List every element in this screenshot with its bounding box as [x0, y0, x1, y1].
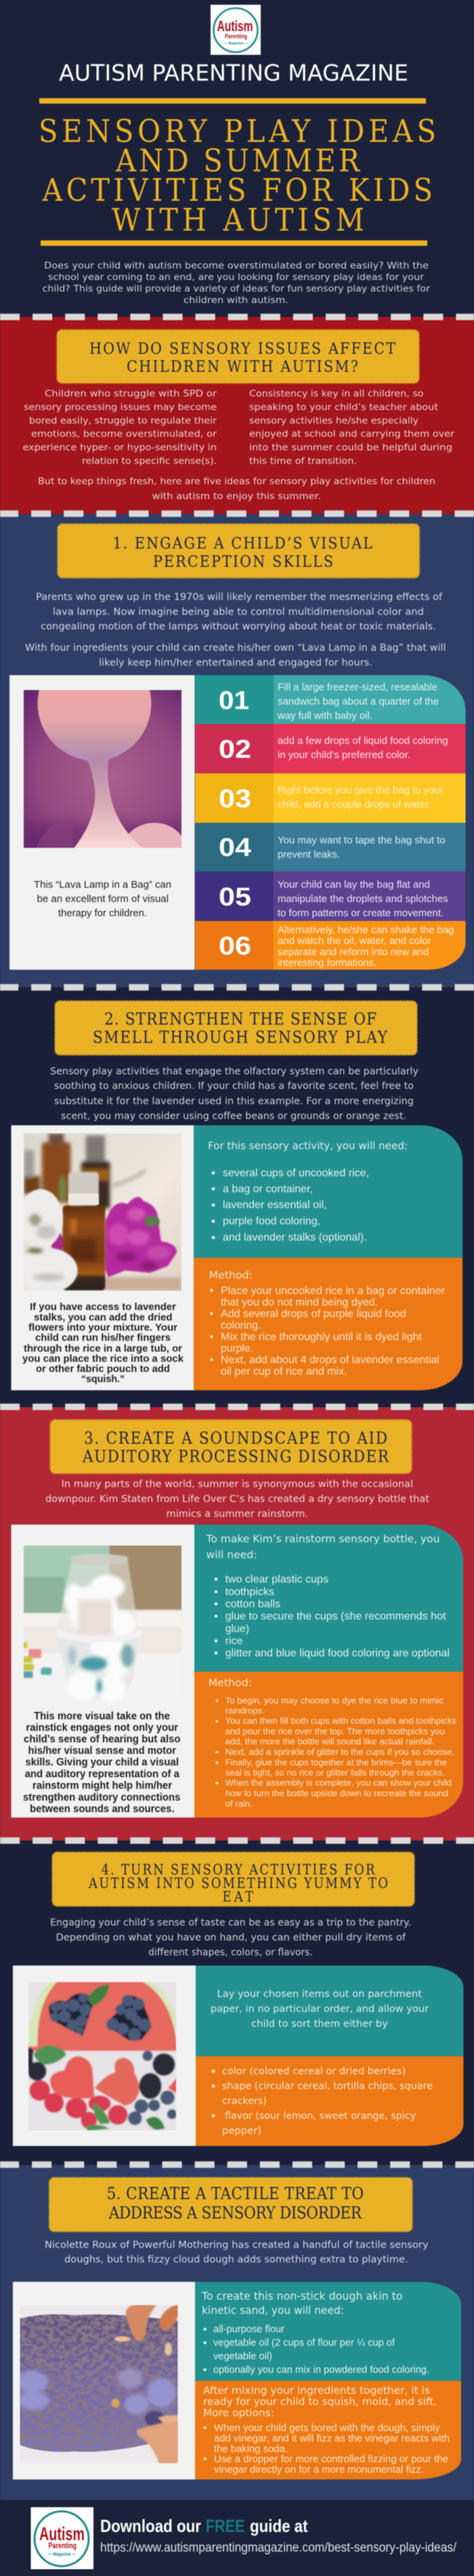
sensory issues section background [0, 317, 474, 514]
panel: rainstorm bottle image and caption [11, 1524, 194, 1818]
heading: section 4: EAT [223, 1889, 253, 1905]
section 4 text [50, 1918, 411, 1958]
panel: rainstorm bottle materials: toothpicks [225, 1586, 274, 1598]
caption: his/her visual sense and motor [28, 1745, 176, 1757]
step 06: separate and reform into new and [278, 947, 429, 958]
caption: This “Lava Lamp in a Bag” can [34, 879, 171, 890]
caption: child can run his/her fingers [35, 1333, 171, 1344]
step 01 [195, 675, 466, 724]
text block: right column: this time of transition. [249, 456, 357, 467]
intro paragraph: children with autism. [184, 295, 288, 305]
heading: how do sensory issues affect: HOW DO SENSORY ISSUES AFFECT [89, 341, 395, 358]
caption [23, 1711, 181, 1815]
section 3 background [0, 1407, 474, 1841]
section 5 text: doughs, but this fizzy cloud dough adds something extra to playtime. [64, 2254, 408, 2265]
step 05 [195, 872, 466, 921]
icon: footer logo: Autism [39, 2523, 85, 2544]
section 2 text: substitute it for the lavender used in this example. For a more energizing [54, 1096, 414, 1107]
section 2 background [0, 987, 474, 1407]
text block: left column: bored easily, struggle to regulate their [29, 415, 217, 426]
panel: dough method: ready for your child to squish, mold, and sift. [203, 2396, 437, 2408]
heading: section 1: PERCEPTION SKILLS [153, 553, 333, 571]
caption [22, 1302, 184, 1385]
step 05: manipulate the droplets and splotches [278, 894, 448, 905]
panel: rainstorm bottle materials: cotton balls [225, 1598, 280, 1610]
panel: rainstorm bottle method: To begin, you may choose to dye the rice blue to mimic [225, 1696, 444, 1705]
section 5 background [0, 2165, 474, 2500]
panel: lava lamp image and caption [9, 646, 195, 970]
panel: rainstorm bottle method: and pour the rice over the top. The more toothpicks you [225, 1727, 445, 1736]
closing paragraph: But to keep things fresh, here are five ideas for sensory play activities for children [38, 476, 435, 487]
panel: rainstorm bottle method: You can then fill both cups with cotton balls and toothpicks [225, 1717, 456, 1726]
panel: rainstorm bottle method: of rain. [225, 1799, 253, 1809]
panel: dough method: Use a dropper for more controlled fizzing or pour the [214, 2454, 448, 2465]
panel: materials list [194, 1125, 462, 1258]
panel: rainstorm bottle method: When the assembly is complete, you can show your child [225, 1778, 452, 1788]
section 1 text: lava lamps. Now imagine being able to control multidimensional color and [53, 607, 424, 618]
step 06: interesting formations. [278, 958, 376, 968]
step 03: child, add a couple drops of water. [278, 800, 431, 811]
panel: dough image [13, 2282, 195, 2480]
icon: magazine logo [211, 5, 261, 55]
step 01: sandwich bag about a quarter of the [278, 696, 439, 707]
section 2 text [50, 1066, 418, 1122]
text block: right column: sensory activities he/she especially [249, 415, 418, 426]
caption: flowers into your mixture. Your [28, 1323, 177, 1333]
heading: section 5: ADDRESS A SENSORY DISORDER [108, 2204, 362, 2223]
panel: rainstorm bottle method: Finally, glue the cups together at the brims—be sure the [225, 1758, 447, 1767]
heading: section 2: SMELL THROUGH SENSORY PLAY [93, 1029, 388, 1047]
caption: and auditory representation of a [25, 1769, 179, 1780]
section 1 text [25, 592, 446, 668]
caption: be an excellent form of visual [37, 893, 169, 905]
step 05: Your child can lay the bag flat and [278, 880, 430, 890]
text block: right column [249, 389, 454, 467]
section 2 text: soothing to anxious children. If your child has a favorite scent, feel free to [54, 1081, 414, 1092]
caption: between sounds and sources. [30, 1803, 175, 1815]
heading: how do sensory issues affect [57, 330, 418, 383]
caption: therapy for children. [58, 907, 147, 919]
panel: dough method: vinegar directly on for a more monumental fizz. [214, 2464, 424, 2475]
section 4 text: different shapes, colors, or flavors. [148, 1948, 313, 1958]
heading: section 4 [53, 1853, 414, 1906]
section 3 text: mimics a summer rainstorm. [167, 1509, 308, 1520]
heading: section 2 [56, 1001, 417, 1055]
caption: you can place the rice into a sock [22, 1354, 184, 1365]
panel: materials list: lavender essential oil, [223, 1199, 327, 1211]
text block: left column: experience hyper- or hypo-sensitivity in [23, 442, 217, 453]
panel: sorting options: pepper) [222, 2125, 261, 2137]
photo: essential oil bottles and flowers [23, 1132, 181, 1291]
panel: rainstorm bottle materials: glitter and blue liquid food coloring are optional [225, 1648, 450, 1659]
closing paragraph: with autism to enjoy this summer. [152, 491, 321, 502]
intro paragraph: school year coming to an end, are you looking for sensory play ideas for your [48, 272, 425, 283]
step 04 [195, 823, 466, 872]
step 05: to form patterns or create movement. [278, 908, 444, 919]
panel: materials list: and lavender stalks (optional). [223, 1232, 367, 1243]
panel: method: coloring. [221, 1320, 261, 1331]
heading: section 1 [58, 524, 419, 578]
step 03: Right before you give the bag to your [278, 786, 444, 796]
section 1 text: Parents who grew up in the 1970s will likely remember the mesmerizing effects of [36, 592, 443, 603]
call to action [100, 2516, 308, 2536]
panel: dough materials: all-purpose flour [213, 2323, 284, 2335]
panel: method: Place your uncooked rice in a bag or container [221, 1285, 446, 1297]
panel: dough materials: optionally you can mix in powdered food coloring. [213, 2364, 429, 2376]
text block: left column: Children who struggle with SPD or [45, 389, 217, 400]
panel: rainstorm bottle materials: glue) [225, 1623, 249, 1635]
step 04: 04 [219, 834, 251, 862]
panel: dough materials: To create this non-stick dough akin to [201, 2290, 403, 2302]
call to action: Download our [100, 2516, 201, 2536]
step 02: 02 [219, 735, 251, 764]
section 3 text [45, 1479, 430, 1520]
section 1 text: With four ingredients your child can create his/her own “Lava Lamp in a Bag” that will [25, 643, 446, 653]
panel: rainstorm bottle materials: will need: [206, 1549, 257, 1561]
panel: method: that you do not mind being dyed. [221, 1297, 378, 1308]
section 1 text: congealing motion of the lamps without worrying about heat or toxic materials. [41, 622, 436, 632]
list: six lava lamp steps [195, 675, 466, 970]
step 04: prevent leaks. [278, 850, 340, 861]
step 04: You may want to tape the bag shut to [278, 836, 446, 846]
icon: magazine logo: — Magazine — [224, 42, 248, 46]
photo: lava lamp [23, 689, 182, 849]
panel: method: purple. [221, 1343, 253, 1354]
heading: section 1: 1. ENGAGE A CHILD’S VISUAL [112, 535, 372, 553]
panel: essential oils image and caption [11, 1125, 194, 1390]
text block: right column: into the summer could be helpful during [249, 442, 452, 453]
heading: section 3 [50, 1420, 412, 1474]
section 1 background [0, 514, 474, 987]
footer background [0, 2500, 474, 2576]
step 03: 03 [219, 785, 251, 813]
panel: sorting instructions [196, 1965, 463, 2056]
panel: rainstorm bottle method: Next, add a sprinkle of glitter to the cups if you so choose. [225, 1747, 454, 1757]
panel: dough method: the baking soda. [214, 2444, 288, 2455]
section 5 text [45, 2239, 429, 2265]
title: AND SUMMER [115, 143, 360, 179]
panel: dough materials: kinetic sand, you will need: [202, 2304, 344, 2317]
heading: section 5: 5. CREATE A TACTILE TREAT TO [107, 2185, 364, 2204]
panel: dough method: add vinegar, and it will fizz as the vinegar reacts with [214, 2434, 450, 2445]
panel: sorting instructions: child to sort them either by [251, 2018, 388, 2030]
brand name: AUTISM PARENTING MAGAZINE [59, 60, 408, 86]
text block: right column: Consistency is key in all children, so [249, 389, 424, 400]
caption [34, 879, 171, 919]
intro paragraph: child? This guide will provide a variety of ideas for fun sensory play activities for [42, 284, 431, 294]
step 01: 01 [219, 687, 249, 715]
panel: dough method: After mixing your ingredients together, it is [203, 2384, 430, 2397]
panel: sorting instructions: paper, in no particular order, and allow your [211, 2003, 429, 2015]
panel: sorting options: shape (circular cereal, tortilla chips, square [222, 2080, 433, 2092]
panel: dough method: When your child gets bored with the dough, simply [214, 2423, 440, 2434]
caption: through the rice in a large tub, or [24, 1344, 182, 1354]
photo: rainstorm sensory bottle [23, 1545, 182, 1700]
step 06: and watch the oil, water, and color [278, 936, 431, 947]
step 02: add a few drops of liquid food coloring [278, 735, 448, 746]
panel: method: Add several drops of purple liquid food [221, 1308, 406, 1320]
section 1 text: likely keep him/her entertained and engaged for hours. [99, 658, 372, 668]
step 05: 05 [219, 883, 251, 911]
section 2 text: scent, you may consider using coffee beans or grounds or orange zest. [61, 1111, 406, 1122]
step 06: 06 [219, 932, 251, 960]
panel: rainstorm bottle materials [194, 1524, 463, 1672]
panel: rainstorm bottle method: Method: [209, 1677, 252, 1689]
panel: dough materials: vegetable oil (2 cups of flour per ¼ cup of [213, 2337, 395, 2348]
panel: method: Method: [209, 1269, 253, 1281]
title: SENSORY PLAY IDEAS [39, 113, 436, 150]
panel: rainstorm bottle method [194, 1672, 463, 1818]
text block: right column: speaking to your child’s teacher about [249, 402, 439, 412]
text block: left column: emotions, become overstimulated, or [31, 429, 217, 439]
caption: or other fabric pouch to add [36, 1364, 170, 1375]
panel: dough materials: vegetable oil) [213, 2350, 272, 2362]
icon: magazine logo: Autism [217, 18, 253, 35]
panel: rainstorm bottle materials: two clear plastic cups [225, 1574, 328, 1585]
intro paragraph: Does your child with autism become overstimulated or bored easily? With the [44, 261, 429, 271]
caption: This more visual take on the [34, 1711, 170, 1722]
section 4 text: Depending on what you have on hand, you can either pull dry items of [56, 1933, 406, 1944]
panel: materials list: purple food coloring, [223, 1216, 320, 1227]
icon: magazine logo: Parenting [225, 33, 247, 41]
icon: footer logo: Parenting [48, 2541, 77, 2550]
section 3 text: In many parts of the world, summer is synonymous with the occasional [62, 1479, 413, 1490]
heading: section 4: AUTISM INTO SOMETHING YUMMY TO [88, 1875, 388, 1891]
photo: purple tactile dough and hands [19, 2304, 179, 2464]
step 06 [195, 921, 466, 970]
panel: sorting options [196, 2056, 463, 2146]
panel: method [194, 1258, 462, 1390]
step 03 [195, 773, 466, 823]
caption: strengthen auditory connections [23, 1792, 181, 1803]
caption: rainstick engages not only your [26, 1722, 178, 1734]
heading: section 3: 3. CREATE A SOUNDSCAPE TO AID [84, 1430, 387, 1448]
title: WITH AUTISM [112, 202, 364, 238]
panel: fruit image [13, 1965, 196, 2146]
title: ACTIVITIES FOR KIDS [42, 173, 433, 209]
caption: stalks, you can add the dried [34, 1312, 173, 1323]
caption: child’s sense of hearing but also [24, 1734, 180, 1745]
section 4 background [0, 1841, 474, 2165]
panel: sorting instructions: Lay your chosen items out on parchment [217, 1988, 422, 2000]
step 01: Fill a large freezer-sized, resealable [278, 682, 437, 693]
call to action: guide at [250, 2516, 308, 2536]
panel: method: Mix the rice thoroughly until it is dyed light [221, 1331, 423, 1343]
text block: left column: sensory processing issues may become [24, 402, 217, 412]
section 2 text: Sensory play activities that engage the olfactory system can be particularly [50, 1066, 418, 1077]
text block: left column [23, 389, 217, 467]
panel: rainstorm bottle materials: To make Kim’s rainstorm sensory bottle, you [206, 1533, 440, 1545]
text block: right column: enjoyed at school and carrying them over [249, 429, 454, 439]
panel: rainstorm bottle method: add, the more the bottle will sound like actual rainfall. [225, 1737, 435, 1746]
title [39, 113, 436, 238]
panel: sorting options: crackers) [222, 2095, 267, 2107]
panel: rainstorm bottle method: raindrops. [225, 1706, 265, 1716]
icon: footer logo: — Magazine — [48, 2552, 76, 2557]
panel: rainstorm bottle method: how to turn the bottle upside down to recreate the sound [225, 1789, 448, 1799]
panel: rainstorm bottle materials: glue to secure the cups (she recommends hot [225, 1610, 446, 1622]
heading: section 2: 2. STRENGTHEN THE SENSE OF [104, 1010, 376, 1029]
text block: left column: relation to specific sense(s). [82, 456, 217, 467]
header section background [0, 0, 474, 317]
heading: section 4: 4. TURN SENSORY ACTIVITIES FOR [102, 1862, 376, 1878]
caption: If you have access to lavender [30, 1302, 176, 1312]
caption: rainstorm might help him/her [33, 1780, 172, 1792]
panel: rainstorm bottle method: seal is tight, so no rice or glitter falls through the cracks. [225, 1768, 445, 1778]
panel: dough materials [195, 2282, 461, 2381]
section 5 text: Nicolette Roux of Powerful Mothering has created a handful of tactile sensory [45, 2239, 429, 2251]
panel: rainstorm bottle materials: rice [225, 1635, 243, 1647]
panel: sorting options: flavor (sour lemon, sweet orange, spicy [225, 2110, 416, 2122]
heading: how do sensory issues affect: CHILDREN WITH AUTISM? [127, 358, 358, 376]
step 01: way full with baby oil. [277, 710, 372, 721]
section 3 text: downpour. Kim Staten from Life Over C’s has created a dry sensory bottle that [45, 1494, 430, 1505]
panel: materials list: a bag or container, [223, 1184, 313, 1195]
panel: method: Next, add about 4 drops of lavender essential [221, 1354, 439, 1366]
panel: dough method: More options: [203, 2407, 274, 2419]
panel: materials list: several cups of uncooked rice, [223, 1167, 369, 1179]
icon: footer logo [31, 2507, 93, 2569]
step 02: in your child’s preferred color. [278, 750, 410, 760]
panel: dough method [195, 2381, 461, 2480]
caption: skills. Giving your child a visual [26, 1757, 179, 1768]
step 02 [195, 724, 466, 773]
closing paragraph [38, 476, 435, 502]
photo: watermelon hearts and berries [28, 1981, 177, 2131]
panel: method: oil per cup of rice and mix. [221, 1366, 347, 1377]
step 06: Alternatively, he/she can shake the bag [278, 925, 454, 936]
caption: “squish.” [81, 1374, 125, 1385]
section 4 text: Engaging your child’s sense of taste can be as easy as a trip to the pantry. [50, 1918, 411, 1929]
heading: section 3: AUDITORY PROCESSING DISORDER [82, 1448, 389, 1466]
call to action: FREE [206, 2516, 245, 2536]
panel: materials list: For this sensory activity, you will need: [208, 1140, 408, 1152]
heading: section 5 [49, 2178, 412, 2231]
panel: sorting options: color (colored cereal or dried berries) [222, 2065, 406, 2077]
intro paragraph [42, 261, 431, 305]
